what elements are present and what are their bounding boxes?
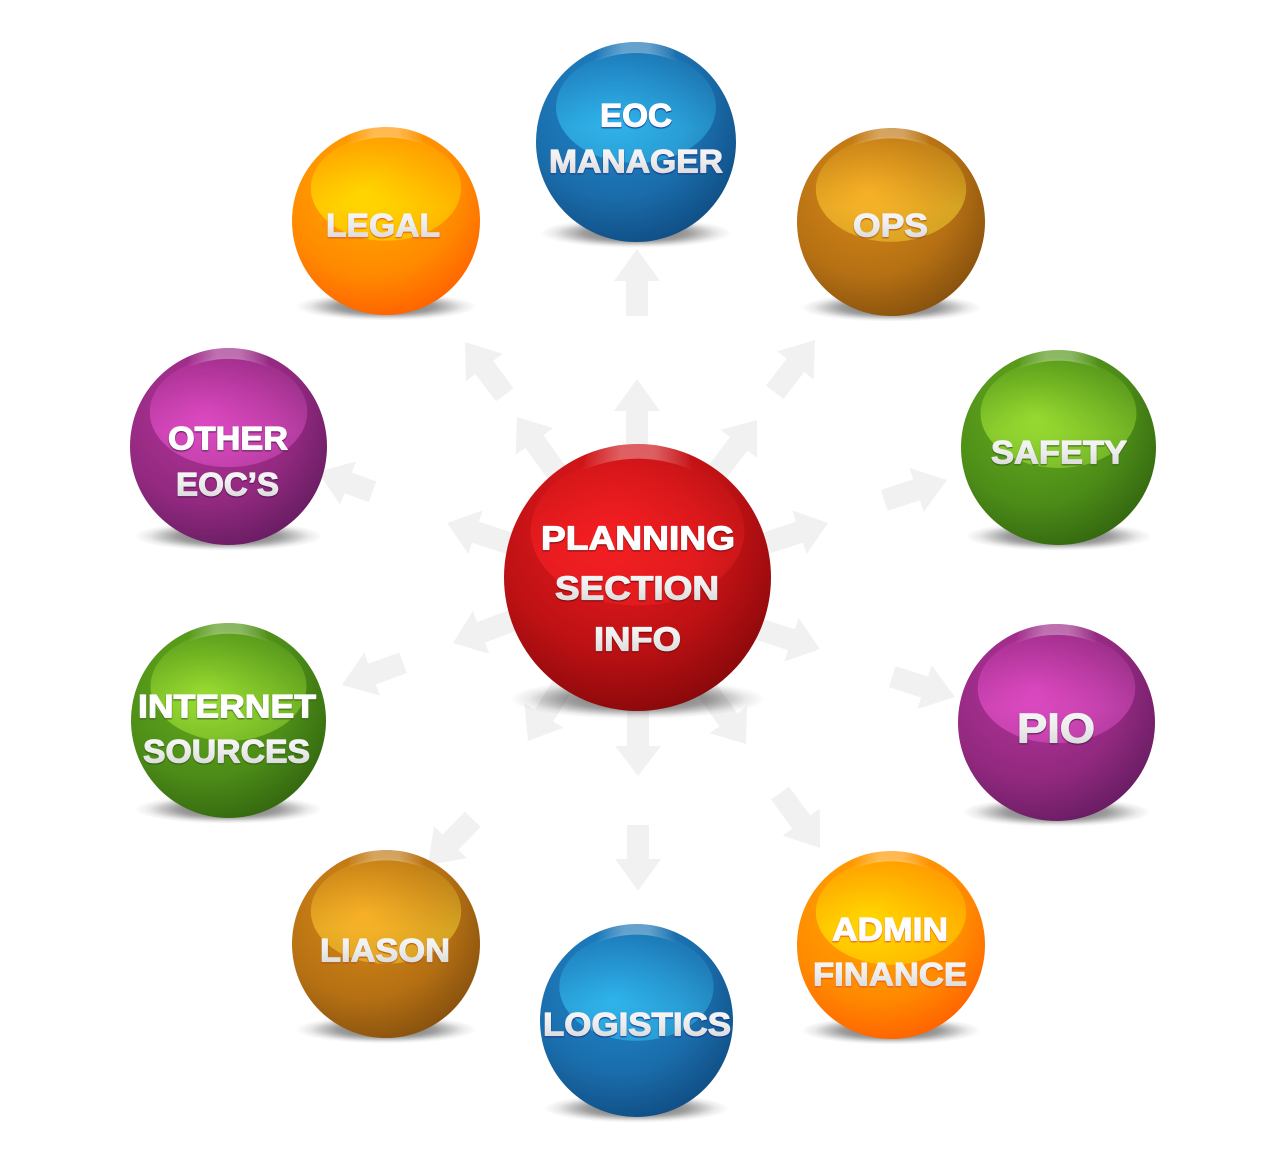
sphere: OPS: OPS: [853, 207, 928, 243]
sphere: EOC manager: [536, 42, 736, 248]
arrow to EOC manager: [614, 249, 660, 316]
sphere: OPS: [797, 128, 985, 322]
sphere: internet sources: SOURCES: [143, 733, 310, 769]
sphere: PIO: [958, 624, 1155, 827]
sphere: PIO: PIO: [1017, 704, 1095, 751]
inner arrow left up: [440, 501, 530, 570]
sphere: liason: LIASON: [320, 932, 450, 968]
sphere: legal: [292, 127, 480, 321]
inner arrow down left: [508, 661, 590, 753]
sphere: admin finance: ADMIN: [832, 911, 948, 947]
inner arrow up: [614, 379, 660, 469]
arrow to PIO: [885, 655, 962, 719]
arrow to legal: [447, 328, 523, 409]
sphere: internet sources: [131, 623, 326, 824]
outer arrows: [310, 249, 962, 891]
inner arrows: [440, 379, 835, 776]
arrow to internet sources: [334, 641, 411, 707]
arrow to other EOCs: [310, 450, 380, 513]
sphere: legal: LEGAL: [326, 207, 440, 243]
arrow to safety: [877, 458, 954, 522]
sphere: planning section info (centre): PLANNING: [541, 519, 735, 556]
sphere: logistics: [540, 924, 733, 1123]
sphere: planning section info (centre): [504, 444, 771, 719]
inner arrow right down: [737, 602, 827, 671]
sphere: admin finance: [797, 851, 985, 1045]
sphere: liason: [292, 850, 480, 1044]
sphere: internet sources: INTERNET: [138, 688, 317, 724]
inner arrow down: [615, 686, 661, 776]
sphere: planning section info (centre): SECTION: [555, 569, 719, 606]
arrow to logistics: [615, 825, 661, 891]
inner arrow left down: [445, 593, 536, 665]
inner arrow right up: [745, 501, 835, 570]
sphere: other EOCs: OTHER: [168, 420, 288, 456]
sphere: safety: [961, 350, 1156, 551]
inner arrow up right: [684, 406, 775, 505]
arrow to admin finance: [761, 779, 839, 862]
sphere: other EOCs: [130, 348, 327, 551]
sphere: safety: SAFETY: [991, 434, 1127, 470]
sphere: admin finance: FINANCE: [813, 956, 967, 992]
sphere: EOC manager: MANAGER: [549, 143, 723, 179]
sphere: planning section info (centre): INFO: [594, 620, 681, 657]
sphere: logistics: LOGISTICS: [543, 1006, 731, 1042]
inner arrow down right: [680, 666, 765, 758]
arrow to liason: [412, 803, 489, 881]
inner arrow up left: [498, 404, 588, 504]
sphere: other EOCs: EOC’S: [176, 466, 279, 502]
arrow to OPS: [757, 326, 833, 406]
sphere: EOC manager: EOC: [600, 97, 672, 133]
